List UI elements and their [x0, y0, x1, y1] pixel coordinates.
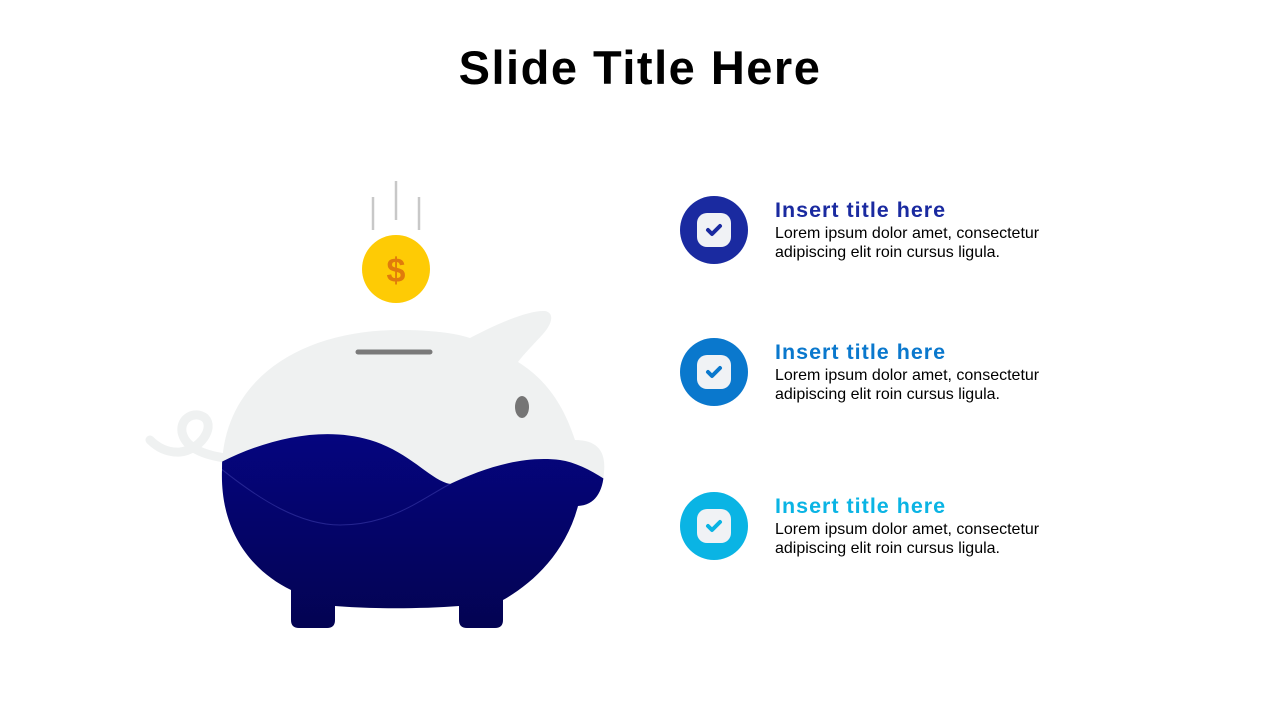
item 3: Lorem ipsum dolor amet, consectetur	[775, 521, 1039, 538]
item 1: Insert title here	[775, 198, 946, 222]
motion lines	[373, 181, 419, 230]
tail	[150, 415, 225, 458]
item 3	[680, 492, 1039, 560]
item 2: adipiscing elit roin cursus ligula.	[775, 386, 1000, 403]
icon: check 1	[680, 196, 748, 264]
item 1: Lorem ipsum dolor amet, consectetur	[775, 225, 1039, 242]
coin	[362, 235, 430, 303]
icon: check 3	[680, 492, 748, 560]
pig body	[222, 311, 604, 628]
title: Slide Title Here	[459, 41, 821, 94]
item 3: adipiscing elit roin cursus ligula.	[775, 540, 1000, 557]
item 2: Lorem ipsum dolor amet, consectetur	[775, 367, 1039, 384]
item 2: Insert title here	[775, 340, 946, 364]
eye	[515, 396, 529, 418]
coin slot	[358, 350, 430, 354]
item 1: adipiscing elit roin cursus ligula.	[775, 244, 1000, 261]
item 1	[680, 196, 1039, 264]
piggy bank illustration	[146, 181, 604, 628]
item 3: Insert title here	[775, 494, 946, 518]
icon: check 2	[680, 338, 748, 406]
coin: $	[387, 252, 406, 290]
item 2	[680, 338, 1039, 406]
